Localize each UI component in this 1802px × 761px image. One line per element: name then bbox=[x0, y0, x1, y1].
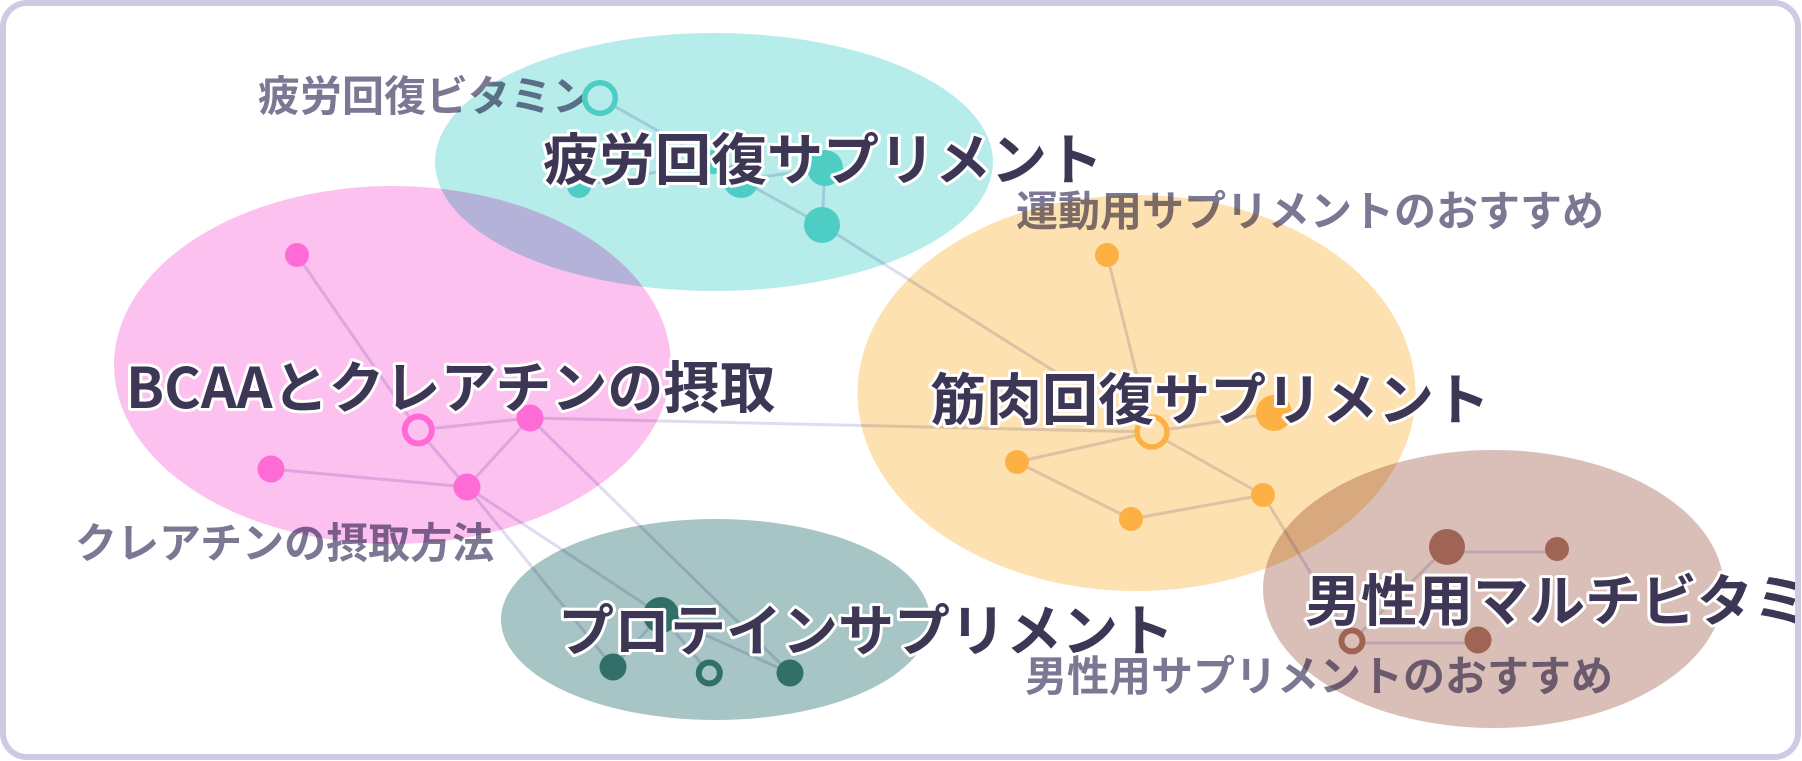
cluster: fatigue recovery bbox=[435, 33, 993, 291]
nodes: men's multivitamin bbox=[1342, 529, 1569, 654]
sub label: men's supplements: 男性用サプリメントのおすすめ bbox=[1025, 643, 1613, 704]
heading: BCAA and creatine intake: BCAAとクレアチンの摂取 bbox=[126, 344, 775, 425]
nodes: fatigue recovery bbox=[567, 83, 843, 243]
nodes: protein bbox=[600, 597, 804, 686]
network links bbox=[271, 98, 1557, 673]
heading: protein supplements: プロテインサプリメント bbox=[558, 587, 1174, 668]
heading: muscle recovery supplements: 筋肉回復サプリメント bbox=[930, 356, 1490, 437]
sub label: workout supplements: 運動用サプリメントのおすすめ bbox=[1016, 178, 1604, 239]
heading: fatigue recovery supplements: 疲労回復サプリメント bbox=[543, 116, 1103, 197]
sub label: fatigue vitamins: 疲労回復ビタミン bbox=[258, 63, 594, 124]
nodes: muscle recovery bbox=[1005, 243, 1292, 531]
cluster: BCAA and creatine bbox=[114, 186, 671, 544]
sub label: creatine intake: クレアチンの摂取方法 bbox=[75, 510, 494, 571]
nodes: BCAA and creatine bbox=[258, 243, 544, 500]
cluster: muscle recovery bbox=[858, 195, 1416, 591]
cluster: men's multivitamin bbox=[1263, 450, 1724, 728]
cluster: protein bbox=[501, 519, 930, 720]
